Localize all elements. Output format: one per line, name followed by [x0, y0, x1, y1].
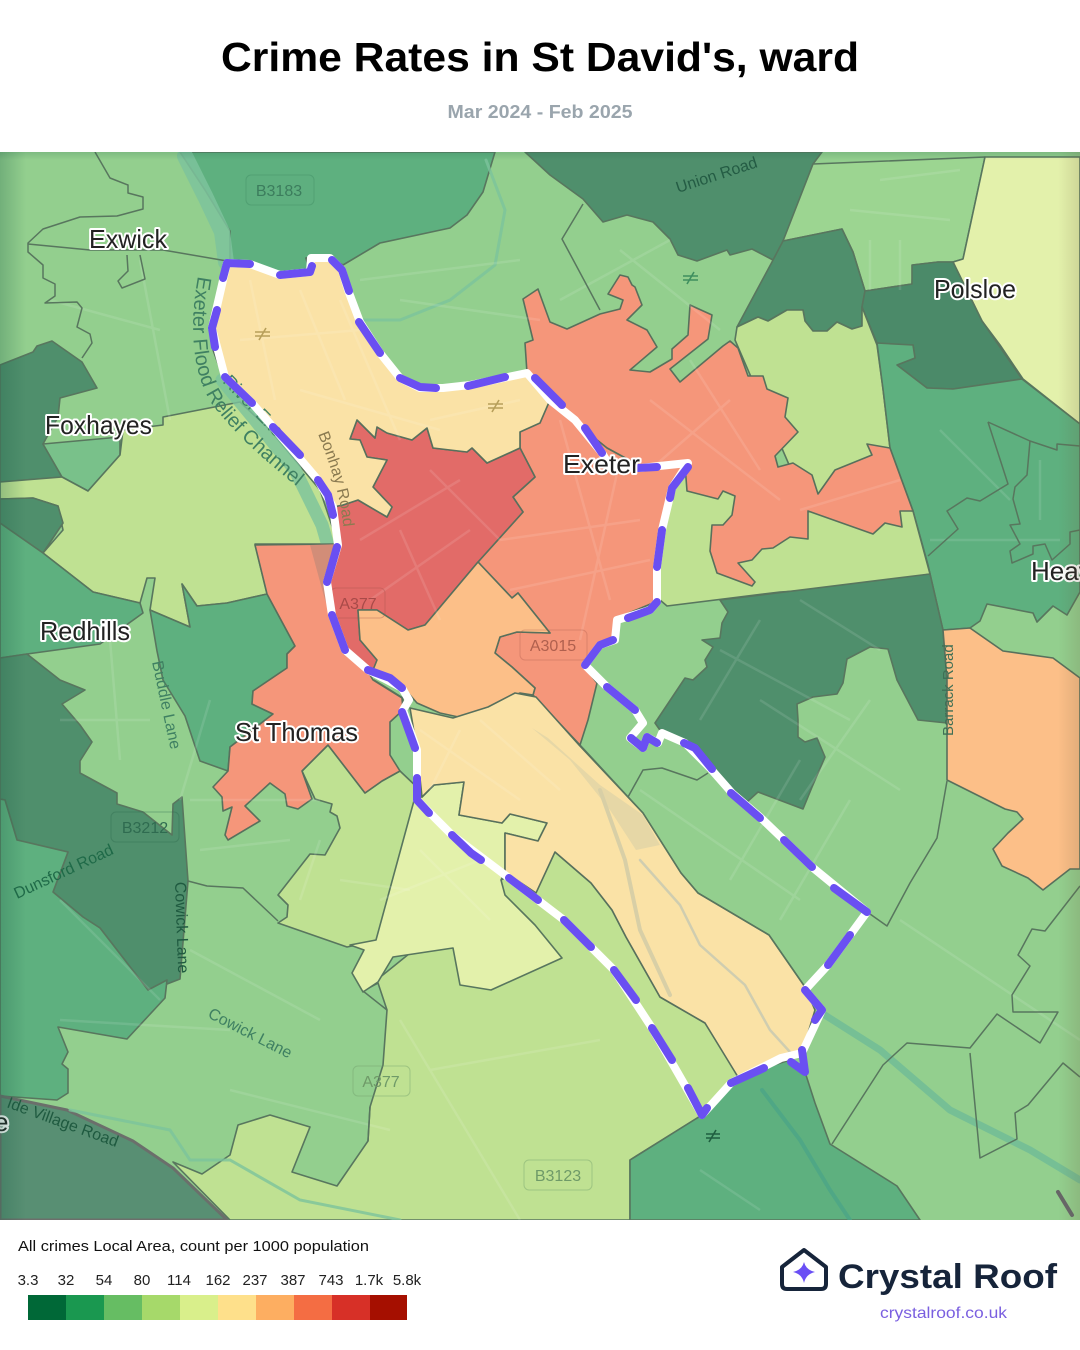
map control glyph [1058, 1192, 1072, 1215]
label: Barrack Road: Barrack Road [940, 644, 957, 736]
overlap shade beside river [310, 544, 347, 653]
label: Bonhay Road: Bonhay Road [318, 431, 355, 526]
base area colour [0, 152, 1080, 1220]
ward outline: purple dashes [212, 260, 867, 1115]
legend scale values: 114 [167, 1272, 191, 1289]
road shields [111, 175, 592, 1190]
title: Crime Rates in St David's, ward [221, 34, 859, 80]
legend scale values: 1.7k [355, 1272, 384, 1289]
legend scale values: 54 [96, 1272, 112, 1289]
legend scale values: 237 [242, 1272, 268, 1289]
choropleth map [0, 152, 1080, 1220]
header [221, 34, 859, 122]
legend scale values: 5.8k [393, 1272, 422, 1289]
place: Redhills: Redhills [40, 616, 130, 646]
areas: low crime greens [0, 152, 1080, 1220]
edge shading [0, 152, 1080, 1220]
shield: A3015 [520, 630, 587, 660]
label: Cowick Lane vertical: Cowick Lane [171, 882, 191, 974]
legend scale values [18, 1272, 422, 1289]
icon: station north [255, 328, 270, 340]
logo: house with star [782, 1250, 826, 1289]
shield: A377 south: A377 [362, 1074, 400, 1091]
label: Buddle Lane: Buddle Lane [148, 659, 183, 751]
legend colour bar [28, 1295, 407, 1320]
label: River Exe: River Exe [219, 371, 288, 441]
icon: station central [488, 400, 503, 412]
icon: station south [706, 1130, 720, 1142]
place: Foxhayes: Foxhayes [45, 410, 152, 440]
legend and logo footer [18, 1238, 1058, 1322]
shield: A377 north: A377 [339, 596, 377, 613]
legend scale values: 80 [134, 1272, 150, 1289]
label: Ide Village Road: Ide Village Road [5, 1095, 121, 1151]
shield: A377 north [331, 588, 385, 618]
unfilled area boundaries [28, 152, 1080, 1158]
legend scale values: 32 [58, 1272, 74, 1289]
railway and stream lines in the southern ward [600, 790, 790, 1052]
legend scale values: 387 [280, 1272, 306, 1289]
label: Exeter Flood Relief Channel: Exeter Flood Relief Channel [193, 278, 305, 486]
road and river names [5, 155, 957, 1151]
street network [50, 170, 1080, 1220]
place names [0, 224, 1080, 1137]
place: St Thomas: St Thomas [235, 717, 358, 747]
legend scale values: 162 [205, 1272, 231, 1289]
place: Exwick: Exwick [89, 224, 168, 254]
logo wordmark: Crystal Roof [838, 1258, 1058, 1296]
website link text: crystalroof.co.uk [880, 1305, 1008, 1322]
label: Cowick Lane diagonal: Cowick Lane [205, 1005, 295, 1062]
shield: B3212 [111, 812, 179, 842]
area: Barrack Road orange neighbourhood [943, 628, 1080, 890]
label: Dunsford Road: Dunsford Road [12, 842, 116, 903]
legend scale values: 3.3 [18, 1272, 38, 1289]
icon: station Polsloe [683, 272, 698, 284]
place: Exeter: Exeter [563, 449, 640, 479]
shield: B3183: B3183 [256, 183, 302, 200]
areas: high crime ward and neighbours [213, 258, 913, 1077]
rivers [70, 156, 1080, 1220]
subtitle: date range: Mar 2024 - Feb 2025 [448, 102, 632, 122]
shield: A3015: A3015 [530, 638, 576, 655]
shield: B3183 [246, 175, 314, 205]
ward outline: white casing [212, 258, 867, 1115]
shield: A377 south [353, 1066, 410, 1096]
shield: B3212: B3212 [122, 820, 168, 837]
place: Polsloe: Polsloe [934, 274, 1016, 304]
legend title: All crimes Local Area, count per 1000 population [18, 1238, 369, 1255]
ward boundary [212, 258, 867, 1115]
rail station icons [255, 272, 720, 1142]
legend scale values: 743 [318, 1272, 344, 1289]
label: Union Road: Union Road [674, 155, 760, 197]
shield: B3123: B3123 [535, 1168, 581, 1185]
shield: B3123 [524, 1160, 592, 1190]
